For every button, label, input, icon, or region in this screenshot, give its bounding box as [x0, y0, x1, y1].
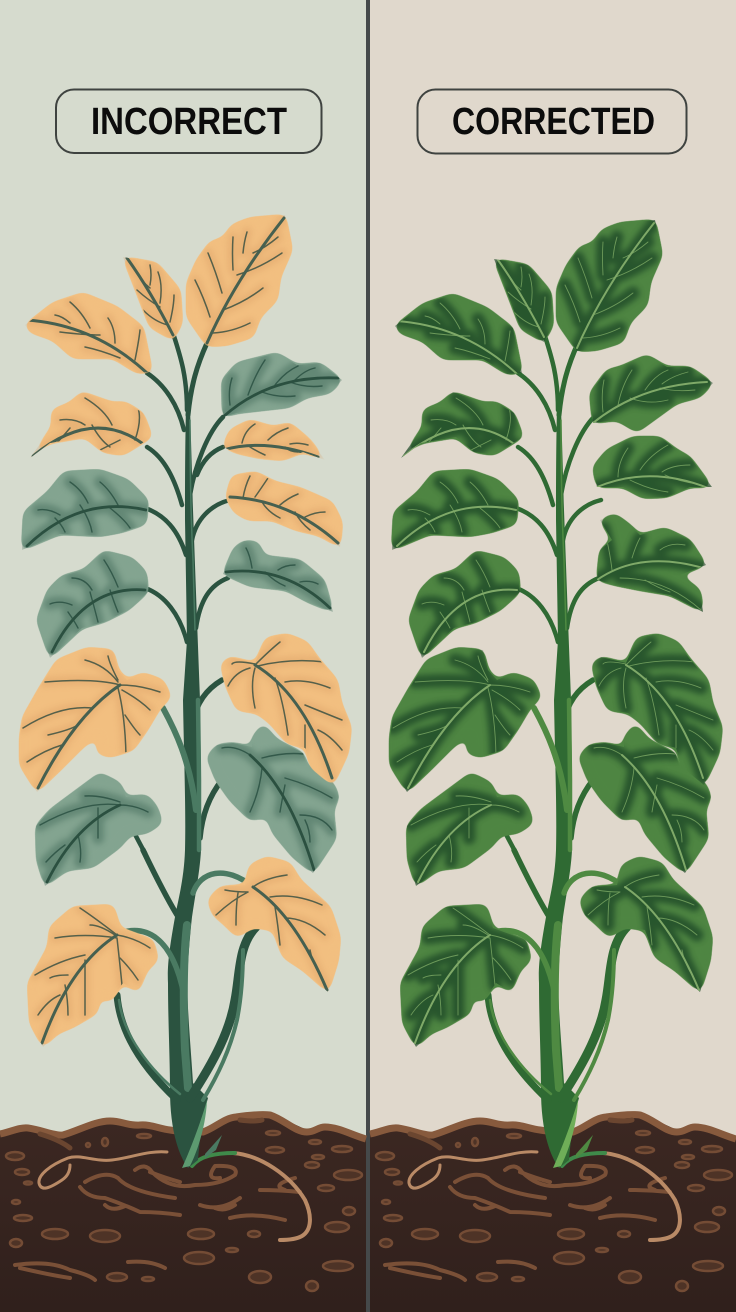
- leaf: green right small: [593, 437, 712, 498]
- leaf: green left: [401, 392, 523, 458]
- leaf: yellowed right small: [223, 420, 325, 460]
- leaf: green mid left: [409, 551, 520, 658]
- leaf: green right folded: [597, 514, 706, 612]
- heading: incorrect: [56, 90, 322, 153]
- leaf: green large left: [390, 648, 541, 792]
- leaf: yellowed upper left: [25, 293, 152, 373]
- leaf: teal mid left: [37, 551, 148, 658]
- heading: corrected: [418, 90, 686, 154]
- leaf: green top large: [557, 220, 662, 351]
- leaf: teal left: [22, 470, 148, 550]
- right plant leaves: [390, 220, 722, 1047]
- leaf: yellowed bottom left: [28, 905, 158, 1047]
- leaf: yellowed large right: [221, 634, 351, 785]
- leaf: yellowed left: [30, 392, 152, 458]
- leaf: teal lower left: [36, 773, 162, 886]
- center divider: [366, 0, 370, 1312]
- soil: right: [370, 1113, 736, 1312]
- leaf: yellowed top large: [187, 215, 292, 346]
- leaf: yellowed right: [226, 472, 342, 547]
- leaf: green lower right: [579, 724, 711, 873]
- plant stems: left: [117, 333, 256, 1168]
- leaf: green top small: [494, 259, 553, 342]
- leaf: yellowed top small: [123, 257, 182, 340]
- leaf: green bottom left: [401, 905, 531, 1047]
- heading: corrected: CORRECTED: [452, 101, 655, 143]
- left plant leaves: [20, 215, 351, 1047]
- leaf: green lower left: [407, 773, 533, 886]
- left panel background: [0, 0, 366, 1312]
- leaf: green bottom right: [580, 857, 712, 992]
- leaf: green large right: [592, 634, 722, 785]
- leaf: yellowed bottom right: [208, 857, 340, 992]
- leaf: green upper right: [590, 355, 713, 432]
- right panel background: [370, 0, 736, 1312]
- soil: left: [0, 1113, 366, 1312]
- plant stems: right: [488, 333, 627, 1168]
- leaf: teal upper right: [222, 353, 342, 417]
- leaf: yellowed large left: [20, 648, 171, 792]
- leaf: teal lower right: [207, 724, 339, 873]
- leaf: teal right small: [223, 541, 333, 612]
- leaf: green left middle: [392, 470, 518, 550]
- heading: incorrect: INCORRECT: [91, 101, 287, 143]
- leaf: green upper left: [395, 294, 522, 374]
